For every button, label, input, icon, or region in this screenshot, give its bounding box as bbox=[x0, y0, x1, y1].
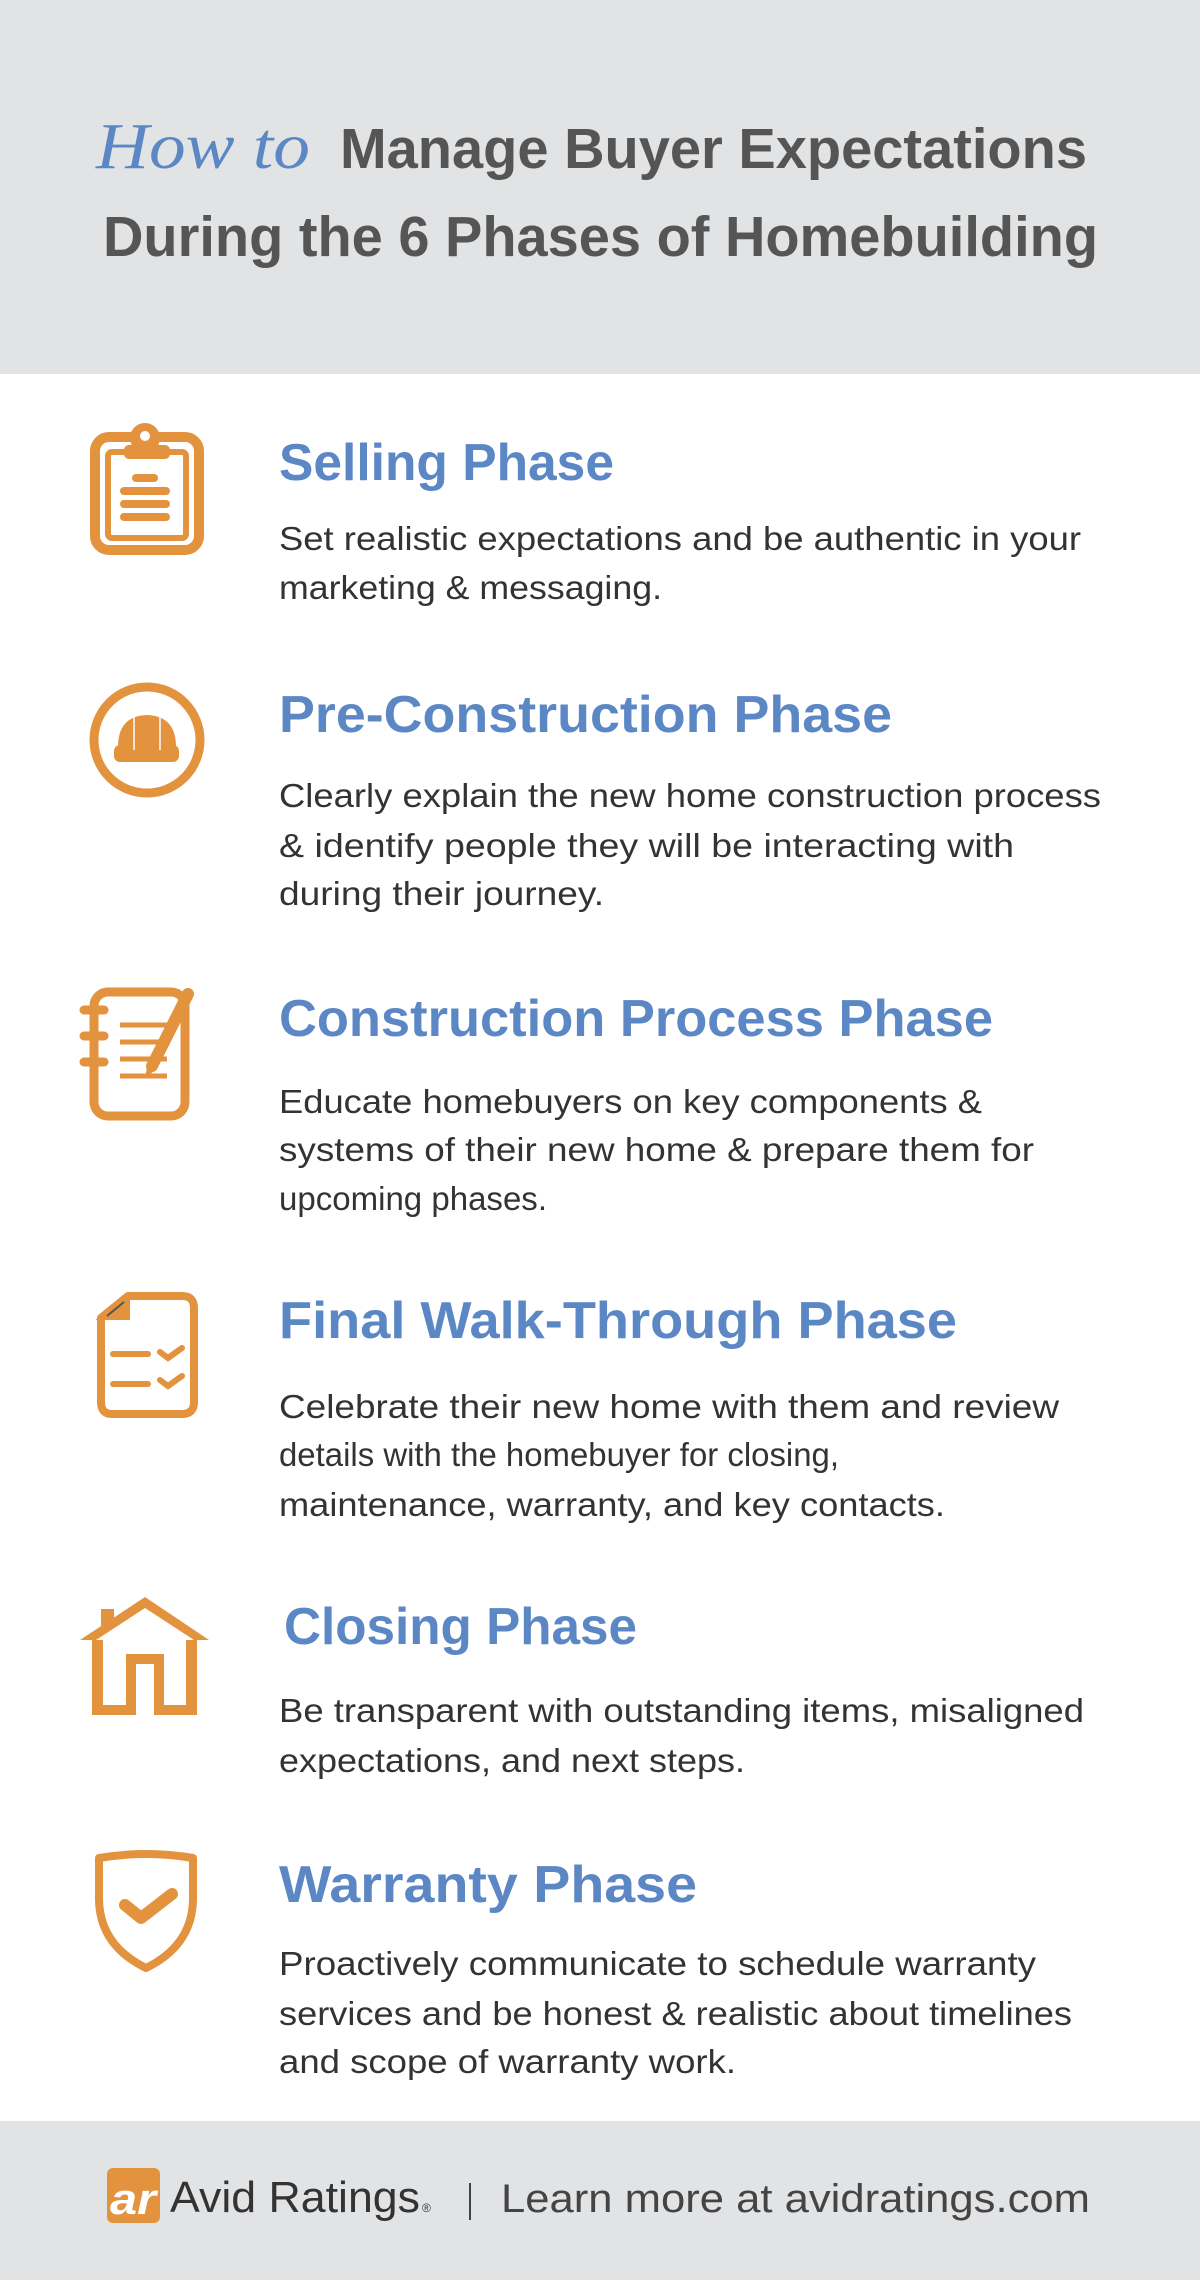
icon: house bbox=[80, 1597, 209, 1715]
heading: construction: Construction Process Phase bbox=[279, 990, 993, 1048]
footer: link text: Learn more at avidratings.com bbox=[501, 2177, 1090, 2221]
icon: checklist document bbox=[101, 1296, 194, 1414]
icon: clipboard bbox=[95, 423, 199, 550]
text: closing bbox=[279, 1692, 1084, 1779]
text: closing: Be transparent with outstanding items, misaligned bbox=[279, 1692, 1084, 1729]
heading: closing: Closing Phase bbox=[284, 1598, 637, 1656]
heading: pre-construction: Pre-Construction Phase bbox=[279, 686, 892, 744]
text: final walk-through: details with the homebuyer for closing, bbox=[279, 1436, 839, 1473]
text: selling: marketing & messaging. bbox=[279, 569, 662, 606]
text: closing: expectations, and next steps. bbox=[279, 1742, 745, 1779]
footer: logo: ar bbox=[110, 2175, 159, 2224]
heading: selling: Selling Phase bbox=[279, 434, 614, 492]
text: selling bbox=[279, 520, 1081, 606]
text: construction: systems of their new home & prepare them for bbox=[279, 1131, 1034, 1168]
text: construction: Educate homebuyers on key components & bbox=[279, 1083, 982, 1120]
text: construction: upcoming phases. bbox=[279, 1180, 547, 1217]
text: construction bbox=[279, 1083, 1034, 1217]
text: final walk-through: Celebrate their new home with them and review bbox=[279, 1388, 1059, 1425]
title: How to bbox=[95, 110, 310, 183]
text: warranty bbox=[279, 1945, 1072, 2080]
title: During the 6 Phases of Homebuilding bbox=[103, 205, 1098, 269]
header band bbox=[0, 0, 1200, 374]
title bbox=[95, 110, 1098, 269]
text: pre-construction bbox=[279, 777, 1101, 912]
text: warranty: Proactively communicate to schedule warranty bbox=[279, 1945, 1037, 1982]
text: final walk-through: maintenance, warranty, and key contacts. bbox=[279, 1486, 945, 1523]
footer: logo: ® bbox=[422, 2201, 431, 2215]
heading: warranty: Warranty Phase bbox=[279, 1856, 697, 1914]
title: Manage Buyer Expectations bbox=[340, 117, 1087, 181]
text: pre-construction: during their journey. bbox=[279, 875, 604, 912]
heading: final walk-through: Final Walk-Through Phase bbox=[279, 1292, 957, 1350]
text: pre-construction: Clearly explain the new home construction process bbox=[279, 777, 1101, 814]
text: selling: Set realistic expectations and be authentic in your bbox=[279, 520, 1081, 557]
text: warranty: services and be honest & realistic about timelines bbox=[279, 1995, 1072, 2032]
text: final walk-through bbox=[279, 1388, 1059, 1523]
footer band bbox=[0, 2121, 1200, 2280]
footer: logo bbox=[107, 2168, 431, 2224]
icon: notebook bbox=[84, 992, 188, 1116]
text: pre-construction: & identify people they will be interacting with bbox=[279, 827, 1014, 864]
icon: hard hat bbox=[94, 687, 200, 793]
footer: logo: Avid Ratings bbox=[170, 2173, 420, 2222]
icon: shield bbox=[99, 1854, 193, 1968]
text: warranty: and scope of warranty work. bbox=[279, 2043, 736, 2080]
